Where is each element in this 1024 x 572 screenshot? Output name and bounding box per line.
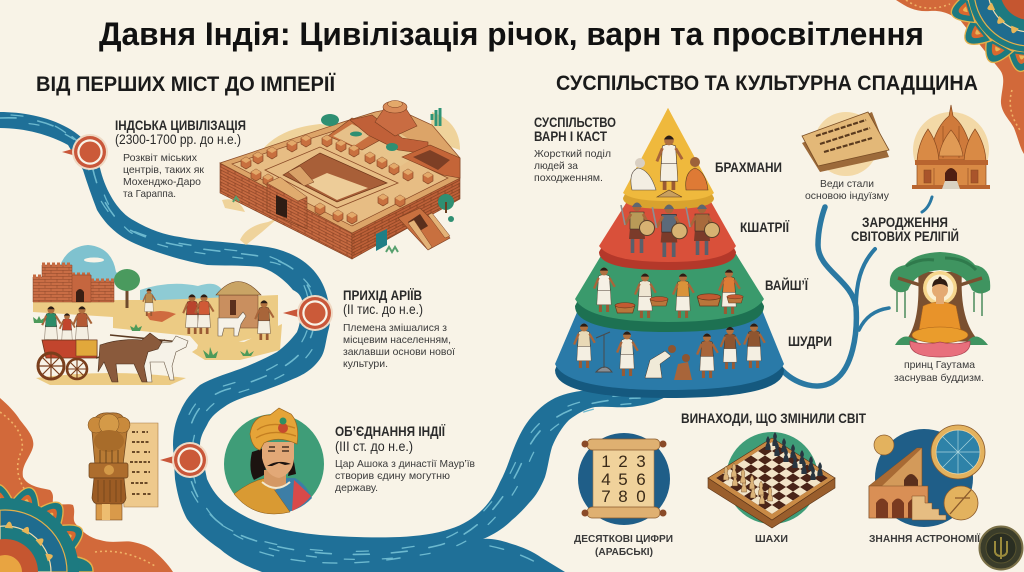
inner wall line	[232, 128, 448, 226]
numerals	[601, 452, 646, 506]
text block: Aryan arrival: заклавши основи нової	[343, 346, 455, 358]
shrubs	[895, 336, 988, 345]
text block: Indus civilization: Мохенджо-Даро	[123, 176, 201, 188]
text block: varna society: походженням.	[534, 172, 603, 184]
timeline marker 2	[283, 295, 333, 331]
cloud	[84, 258, 104, 262]
sand and plants around citadel	[222, 112, 460, 245]
text block: unification of India: державу.	[335, 482, 378, 494]
right room	[402, 145, 460, 178]
brown ox	[98, 333, 162, 382]
wheel large	[38, 353, 64, 379]
icon: astronomy	[869, 425, 985, 527]
head	[936, 296, 944, 304]
text block: varna society: Жорсткий поділ	[534, 148, 611, 160]
caption: Buddha: заснував буддизм.	[894, 372, 984, 384]
text block: varna society	[534, 115, 616, 184]
timeline marker 1	[62, 134, 108, 170]
robe	[234, 478, 312, 514]
branching river of religions	[780, 197, 932, 386]
label: vaishyas: ВАЙШ’Ї	[765, 278, 809, 293]
caption: astronomy: ЗНАННЯ АСТРОНОМІЇ	[869, 532, 981, 545]
citadel top surface	[220, 108, 460, 233]
tree	[126, 285, 128, 308]
heading: birth of world religions: ЗАРОДЖЕННЯ	[862, 215, 948, 230]
parchment	[120, 423, 158, 507]
canopy	[890, 252, 990, 294]
turban	[250, 408, 298, 450]
timeline marker 3	[160, 442, 208, 478]
robe	[918, 302, 962, 336]
right gate ramp	[398, 208, 450, 250]
text block: Aryan arrival	[343, 288, 455, 370]
caption: decimal numerals	[574, 533, 673, 558]
caption: Buddha: принц Гаутама	[904, 359, 975, 371]
caption: Vedas	[805, 178, 890, 202]
icon: Hindu temple	[912, 105, 990, 189]
lotus	[910, 341, 970, 357]
moustache	[267, 462, 291, 466]
sand ground	[33, 295, 278, 352]
text block: unification of India: (III ст. до н.е.)	[335, 439, 413, 454]
text block: Aryan arrival: (II тис. до н.е.)	[343, 302, 423, 317]
illustration: Aryan arrival scene	[33, 245, 282, 385]
neck and face	[264, 470, 286, 490]
caption: decimal numerals: (АРАБСЬКІ)	[595, 546, 653, 558]
text block: unification of India: ОБ’ЄДНАННЯ ІНДІЇ	[335, 424, 446, 439]
corner ornament: top right	[896, 0, 1024, 154]
shrubs	[33, 316, 254, 358]
yellow tier	[623, 108, 714, 209]
bath floor	[305, 173, 368, 200]
heading: right section: СУСПІЛЬСТВО ТА КУЛЬТУРНА СПАДЩИНА	[556, 72, 978, 95]
halo	[923, 271, 957, 305]
brahmin figures	[631, 136, 708, 197]
bath steps	[288, 166, 314, 186]
icon: bronze medal with trident	[980, 526, 1022, 570]
numerals: 6	[636, 470, 646, 489]
text block: unification of India: створив єдину могутню	[335, 470, 450, 482]
text block: varna society: СУСПІЛЬСТВО	[534, 115, 616, 130]
numerals: 3	[636, 452, 646, 471]
text block: Indus civilization: центрів, таких як	[123, 164, 204, 176]
bath outer ring	[265, 147, 398, 208]
numerals: 0	[636, 487, 646, 506]
text block: Indus civilization: Розквіт міських	[123, 152, 198, 164]
label: kshatriyas: КШАТРІЇ	[740, 220, 790, 235]
text block: Indus civilization: (2300-1700 рр. до н.е.)	[115, 132, 241, 147]
text block: varna society: людей за	[534, 160, 578, 172]
caste pyramid	[555, 108, 784, 398]
blue tier	[555, 310, 784, 398]
heading: left section: ВІД ПЕРШИХ МІСТ ДО ІМПЕРІЇ	[36, 73, 336, 96]
stupa mound	[375, 107, 417, 136]
back terrace rooms	[328, 118, 382, 150]
light pieces	[723, 463, 773, 504]
text block: Aryan arrival: ПРИХІД АРІЇВ	[343, 288, 422, 303]
hair	[250, 448, 296, 480]
corner ornament: bottom left	[0, 398, 173, 572]
icon: chess board	[708, 432, 835, 528]
white ox	[140, 336, 188, 382]
villagers	[143, 289, 274, 340]
heading: birth of world religions: СВІТОВИХ РЕЛІГІЙ	[851, 229, 959, 244]
numerals: 5	[618, 470, 628, 489]
greenery	[233, 108, 454, 252]
text block: varna society: ВАРН І КАСТ	[534, 129, 608, 144]
caption: Buddha	[894, 359, 984, 384]
necklace	[262, 482, 290, 488]
red tier	[599, 200, 736, 270]
label: brahmins: БРАХМАНИ	[715, 160, 782, 175]
outer wall right face	[352, 178, 460, 259]
icon: Buddha under Bodhi tree	[890, 252, 990, 357]
gate	[267, 183, 307, 229]
vaishya figures	[594, 267, 743, 318]
text block: Aryan arrival: культури.	[343, 358, 388, 370]
abacus	[89, 463, 128, 478]
dark pieces	[765, 432, 823, 480]
caption: decimal numerals: ДЕСЯТКОВІ ЦИФРИ	[574, 533, 673, 545]
text block: Aryan arrival: Племена змішалися з	[343, 322, 447, 334]
numerals: 8	[618, 487, 628, 506]
caption: chess: ШАХИ	[755, 533, 788, 545]
text block: unification of India: Цар Ашока з династії Маур’їв	[335, 458, 475, 470]
numerals: 2	[618, 452, 628, 471]
chariot	[42, 340, 97, 358]
wall blocks back	[241, 135, 433, 224]
sky	[58, 245, 130, 282]
caption: Vedas: основою індуїзму	[805, 190, 890, 202]
caption: Vedas: Веди стали	[820, 178, 874, 190]
numerals: 7	[601, 487, 611, 506]
wheel small	[67, 359, 87, 379]
illustration: Indus brick citadel	[220, 100, 460, 259]
back terrain	[335, 120, 425, 170]
bath pit	[283, 153, 387, 202]
kshatriya figures	[621, 202, 720, 257]
outer wall left face	[220, 163, 352, 259]
white cow	[218, 312, 246, 336]
shudra figures	[574, 323, 765, 380]
numerals: 4	[601, 470, 611, 489]
numerals: 1	[601, 452, 611, 471]
riders	[42, 306, 92, 346]
icon: decimal numerals scroll	[578, 433, 670, 525]
bell	[92, 478, 126, 504]
text block: unification of India	[335, 424, 475, 494]
illustration: Ashoka pillar and edict	[88, 413, 158, 520]
teal door	[376, 229, 387, 251]
heading: birth of world religions	[851, 215, 959, 244]
branches	[898, 278, 982, 285]
hanging roots	[897, 290, 982, 318]
lion capital	[89, 413, 130, 465]
title: Давня Індія: Цивілізація річок, варн та просвітлення	[99, 16, 924, 52]
fort	[33, 265, 114, 302]
trunk	[906, 272, 980, 342]
text block: Indus civilization	[115, 118, 246, 200]
resting animal	[146, 311, 176, 322]
text block: Indus civilization: ІНДСЬКА ЦИВІЛІЗАЦІЯ	[115, 118, 246, 133]
heading: inventions: ВИНАХОДИ, ЩО ЗМІНИЛИ СВІТ	[681, 411, 867, 426]
text block: Aryan arrival: місцевим населенням,	[343, 334, 451, 346]
hut	[219, 295, 258, 328]
green tier	[575, 254, 764, 332]
eyes	[268, 447, 289, 451]
shaft	[96, 504, 122, 520]
main river timeline	[0, 112, 730, 572]
portrait: emperor Ashoka	[224, 408, 324, 514]
edict glyphs	[130, 432, 151, 494]
text block: Indus civilization: та Гараппа.	[123, 188, 176, 200]
icon: Vedas book	[802, 112, 889, 176]
label: shudras: ШУДРИ	[788, 334, 832, 349]
